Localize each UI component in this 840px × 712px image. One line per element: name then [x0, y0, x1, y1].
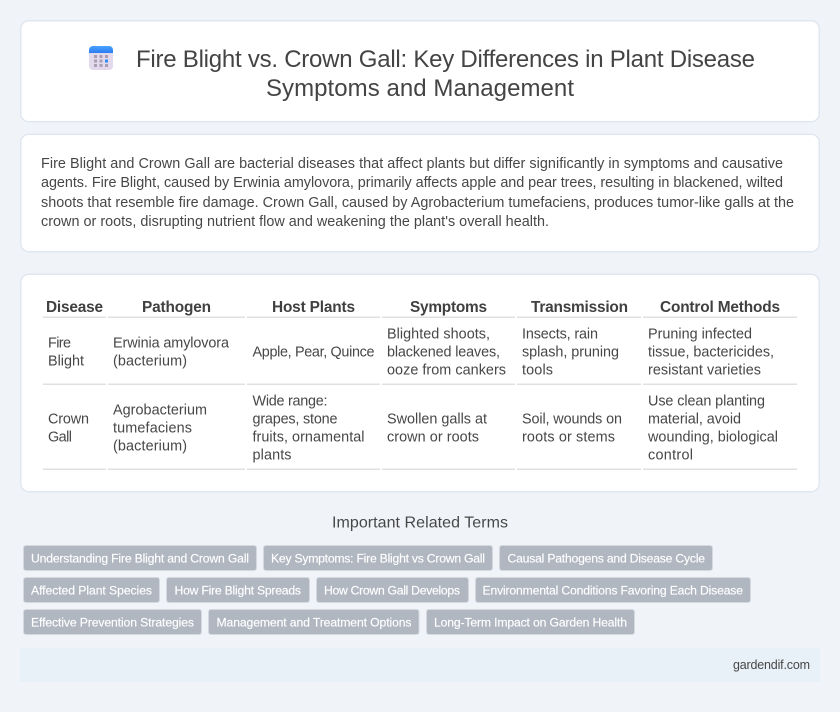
table row: Fire Blight: Blight: [48, 354, 84, 370]
table header row: Pathogen: [142, 299, 211, 316]
table header row: Transmission: [531, 299, 628, 316]
text block: description: Fire Blight and Crown Gall are bacterial diseases that affect plants but differ significantly in symptoms and causative: [41, 156, 783, 172]
tag: Understanding Fire Blight and Crown Gall: [31, 552, 249, 566]
table row: Fire Blight: (bacterium): [113, 354, 187, 370]
table row: Crown Gall: Wide range:: [252, 394, 328, 410]
table row: Fire Blight: Fire: [48, 336, 71, 352]
tag: How Fire Blight Spreads: [174, 584, 301, 598]
table row: Crown Gall: roots or stems: [522, 430, 615, 446]
panel: header: [21, 21, 819, 122]
text block: description: agents. Fire Blight, caused by Erwinia amylovora, primarily affects apple and pear trees, resulting in blackened, wilted: [41, 175, 783, 191]
tag: Affected Plant Species: [31, 584, 152, 598]
table row: Crown Gall: Swollen galls at: [387, 412, 487, 428]
table row: Crown Gall: material, avoid: [648, 412, 741, 428]
table row: Fire Blight: [48, 326, 774, 378]
table row: Fire Blight: ooze from cankers: [387, 362, 506, 378]
tag: [316, 578, 468, 602]
tag: [476, 578, 750, 602]
table row: Fire Blight: Insects, rain: [522, 326, 598, 342]
text block: description: shoots that resemble fire damage. Crown Gall, caused by Agrobacterium tumefaciens, produces tumor-like galls at the: [41, 195, 794, 211]
tag: Effective Prevention Strategies: [31, 616, 194, 630]
text block: description: crown or roots, disrupting nutrient flow and weakening the plant's overall health.: [41, 214, 549, 230]
table row: Fire Blight: tools: [522, 362, 553, 378]
table row: Fire Blight: Blighted shoots,: [387, 326, 490, 342]
table header row: Host Plants: [272, 299, 355, 316]
table row: Crown Gall: Agrobacterium: [113, 402, 207, 418]
table row: Crown Gall: Use clean planting: [648, 394, 765, 410]
table row: Fire Blight: Apple, Pear, Quince: [252, 344, 374, 360]
table row: Crown Gall: grapes, stone: [252, 412, 338, 428]
title: Fire Blight vs. Crown Gall: Key Differences in Plant Disease: [136, 46, 755, 73]
table row: Crown Gall: tumefaciens: [113, 420, 192, 436]
tag: How Crown Gall Develops: [324, 584, 460, 598]
table row: Crown Gall: [48, 394, 778, 464]
tag: Management and Treatment Options: [216, 616, 412, 630]
table header row: Disease: [46, 299, 103, 316]
title: Symptoms and Management: [266, 75, 574, 102]
table header row: [46, 299, 780, 316]
tag: [426, 610, 634, 634]
table row: Crown Gall: control: [648, 448, 693, 464]
tag: [166, 578, 310, 602]
table row: Fire Blight: resistant varieties: [648, 362, 761, 378]
table row: Crown Gall: wounding, biological: [647, 430, 778, 446]
tag: [500, 546, 712, 570]
heading: important related terms: Important Related Terms: [332, 514, 508, 532]
table row: Fire Blight: tissue, bactericides,: [648, 344, 774, 360]
footer: gardendif.com: [733, 658, 810, 672]
table row: Fire Blight: splash, pruning: [522, 344, 619, 360]
table row: Fire Blight: Erwinia amylovora: [113, 336, 229, 352]
tag: [24, 546, 256, 570]
tag: [24, 578, 160, 602]
table row: Crown Gall: crown or roots: [387, 430, 479, 446]
table header row: Control Methods: [660, 299, 780, 316]
table row: Crown Gall: plants: [252, 448, 292, 464]
tag: Key Symptoms: Fire Blight vs Crown Gall: [271, 552, 485, 566]
table header row: Symptoms: [410, 299, 487, 316]
table row: Crown Gall: Soil, wounds on: [522, 412, 622, 428]
tag: [264, 546, 492, 570]
panel: comparison table: [21, 274, 819, 492]
table row: Crown Gall: fruits, ornamental: [252, 430, 364, 446]
tag: Causal Pathogens and Disease Cycle: [508, 552, 705, 566]
tag list: related terms: [24, 546, 750, 634]
icon: calendar: [89, 46, 113, 70]
title: [136, 46, 755, 102]
tag: Environmental Conditions Favoring Each Disease: [482, 584, 743, 598]
footer: [20, 648, 820, 682]
table row: Crown Gall: (bacterium): [113, 438, 187, 454]
table row: Crown Gall: Crown: [48, 412, 89, 428]
table row: Fire Blight: blackened leaves,: [387, 344, 500, 360]
tag: [208, 610, 419, 634]
table row: Crown Gall: Gall: [48, 430, 72, 446]
table row: Fire Blight: Pruning infected: [648, 326, 752, 342]
text block: description: [41, 156, 794, 230]
tag: Long-Term Impact on Garden Health: [434, 616, 627, 630]
tag: [24, 610, 202, 634]
panel: description: [21, 134, 819, 252]
